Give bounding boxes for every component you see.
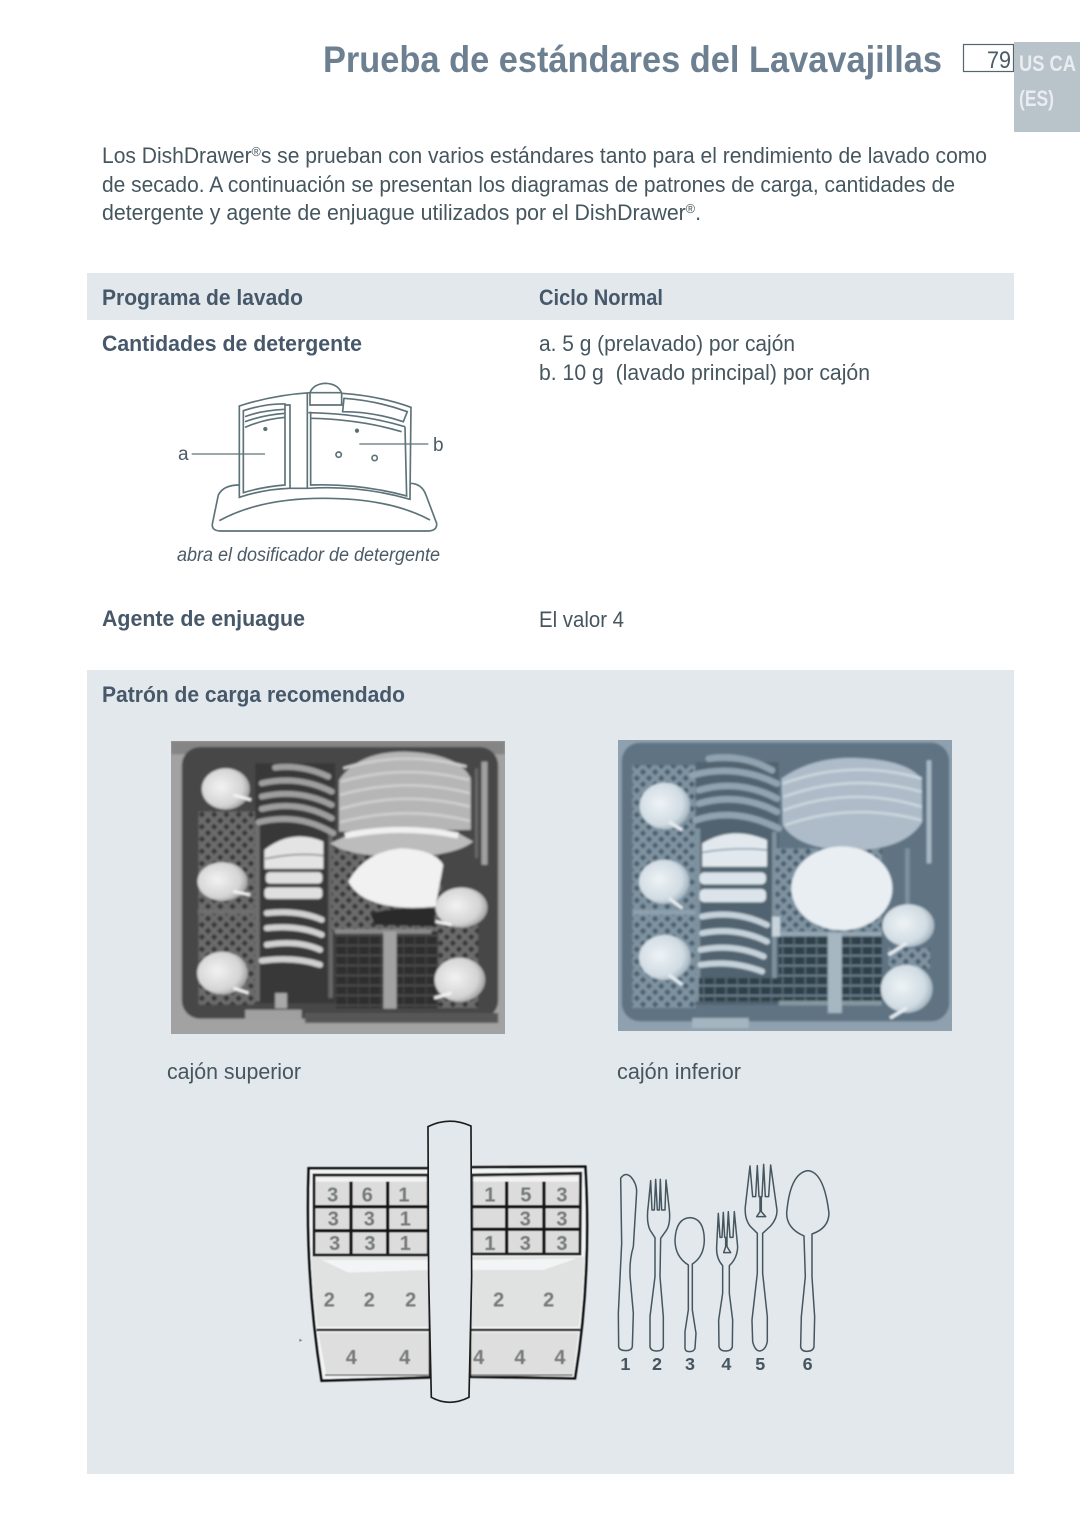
diagram: cutlery basket: 4 <box>399 1347 410 1369</box>
panel heading: Patrón de carga recomendado <box>102 682 405 707</box>
rinse agent row <box>102 606 624 632</box>
diagram: cutlery basket: 3 <box>364 1208 375 1230</box>
intro text <box>102 143 987 225</box>
diagram: cutlery basket: 2 <box>493 1290 504 1312</box>
diagram: cutlery basket: 3 <box>556 1233 568 1255</box>
diagram: cutlery basket: 3 <box>520 1233 531 1255</box>
page number box <box>964 44 1014 74</box>
diagram: cutlery basket: 4 <box>554 1347 566 1369</box>
intro text: . <box>695 200 701 225</box>
photo: lower drawer <box>618 740 952 1031</box>
diagram: cutlery basket: 3 <box>327 1184 338 1206</box>
diagram: cutlery basket: 2 <box>364 1290 375 1312</box>
diagram: cutlery basket: 6 <box>362 1184 373 1206</box>
diagram: cutlery basket: 2 <box>405 1290 416 1312</box>
dispenser label b: b <box>433 435 444 456</box>
language tab: (ES) <box>1019 86 1054 111</box>
diagram: cutlery key: 2 <box>652 1354 662 1374</box>
diagram: cutlery basket <box>299 1121 587 1402</box>
intro text: Los DishDrawer <box>102 143 258 168</box>
title: Prueba de estándares del Lavavajillas <box>323 39 942 80</box>
cutlery: knife 1 <box>618 1175 637 1351</box>
diagram: cutlery basket: 3 <box>556 1208 568 1230</box>
intro text: ® <box>686 201 695 216</box>
panel: loading pattern <box>87 670 1014 1474</box>
diagram: cutlery key: 5 <box>755 1354 765 1374</box>
cutlery: spoon 3 <box>675 1218 704 1352</box>
detergent amounts <box>102 331 870 385</box>
diagram: cutlery basket: 5 <box>520 1184 532 1206</box>
diagram: cutlery basket: 3 <box>364 1233 376 1255</box>
diagram: cutlery basket: 4 <box>346 1347 357 1369</box>
diagram: cutlery key: 4 <box>721 1354 731 1374</box>
diagram: cutlery basket: 1 <box>398 1184 410 1206</box>
diagram: cutlery basket: 3 <box>328 1208 339 1230</box>
language tab <box>1014 42 1080 132</box>
cutlery: fork 4 <box>717 1212 738 1351</box>
icon: detergent dispenser <box>192 383 437 531</box>
diagram: cutlery basket: 2 <box>324 1290 335 1312</box>
cutlery: fork 2 <box>647 1179 670 1351</box>
detergent amounts: a. 5 g (prelavado) por cajón <box>539 331 795 356</box>
label: upper drawer: cajón superior <box>167 1059 301 1084</box>
diagram: cutlery basket: 1 <box>484 1184 496 1206</box>
diagram: cutlery basket: 1 <box>400 1233 411 1255</box>
diagram: cutlery basket: 4 <box>514 1347 526 1369</box>
diagram: cutlery basket: 3 <box>329 1233 340 1255</box>
wash program row <box>87 273 1014 320</box>
dispenser label a: a <box>178 444 189 465</box>
intro text: ® <box>252 144 261 159</box>
intro text: detergente y agente de enjuague utilizados por el DishDrawer <box>102 200 705 225</box>
dispenser caption: abra el dosificador de detergente <box>177 544 440 566</box>
rinse agent row: Agente de enjuague <box>102 606 305 631</box>
photo: upper drawer <box>171 741 505 1034</box>
page number box: 79 <box>987 47 1011 74</box>
diagram: cutlery basket: 3 <box>520 1208 531 1230</box>
detergent amounts: Cantidades de detergente <box>102 331 362 356</box>
diagram: cutlery basket: 3 <box>556 1184 568 1206</box>
diagram: cutlery key <box>618 1164 829 1374</box>
rinse agent row: El valor 4 <box>539 607 624 632</box>
cutlery: spoon 6 <box>787 1171 829 1351</box>
diagram: cutlery key: 1 <box>620 1354 630 1374</box>
diagram: cutlery basket: 2 <box>543 1290 554 1312</box>
wash program row: Ciclo Normal <box>539 285 663 310</box>
diagram: cutlery key: 3 <box>685 1354 695 1374</box>
diagram: cutlery basket: 4 <box>473 1347 484 1369</box>
wash program row: Programa de lavado <box>102 285 303 310</box>
diagram: cutlery basket: 1 <box>484 1233 496 1255</box>
diagram: cutlery basket: 1 <box>400 1208 411 1230</box>
cutlery: fork 5 <box>745 1164 777 1351</box>
diagram: cutlery key: 6 <box>803 1354 813 1374</box>
intro text: s se prueban con varios estándares tanto para el rendimiento de lavado como <box>261 143 987 168</box>
intro text: de secado. A continuación se presentan los diagramas de patrones de carga, cantidades de <box>102 172 955 197</box>
label: lower drawer: cajón inferior <box>617 1059 741 1084</box>
detergent amounts: b. 10 g (lavado principal) por cajón <box>539 360 870 385</box>
